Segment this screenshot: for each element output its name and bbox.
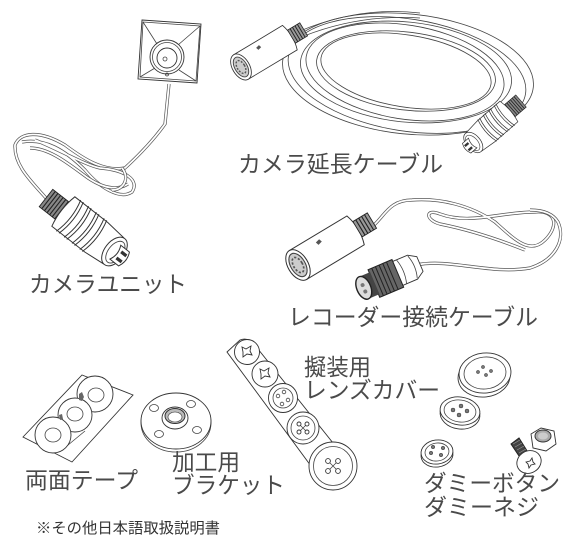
label: dummy button and dummy screw: ダミーボタン	[424, 470, 560, 496]
label: processing bracket	[172, 449, 285, 498]
recorder cable threaded plug	[351, 250, 426, 304]
label: dummy button and dummy screw	[424, 470, 560, 520]
camera unit illustration	[15, 20, 201, 276]
label: recorder connection cable: レコーダー接続ケーブル	[288, 304, 538, 330]
double sided tape illustration	[23, 375, 133, 462]
label: processing bracket: ブラケット	[172, 472, 285, 498]
recorder cable loops	[374, 200, 561, 270]
nut	[531, 428, 556, 451]
label: camera unit: カメラユニット	[29, 271, 187, 297]
dummy screw and nut illustration	[511, 428, 556, 478]
large button	[456, 350, 513, 400]
camera square housing	[138, 20, 201, 83]
recorder connection cable illustration	[281, 200, 561, 304]
extension cable plug	[456, 90, 530, 160]
small button	[419, 438, 455, 469]
label: dummy lens cover	[304, 354, 440, 403]
label: processing bracket: 加工用	[172, 449, 240, 475]
label: dummy button and dummy screw: ダミーネジ	[424, 494, 539, 520]
label: dummy lens cover: レンズカバー	[304, 377, 440, 403]
cable coils	[276, 1, 540, 149]
camera connector	[34, 182, 138, 276]
note: other manuals: ※その他日本語取扱説明書	[36, 520, 220, 537]
recorder cable socket	[281, 206, 381, 285]
camera extension cable illustration	[226, 1, 540, 160]
camera unit cable	[15, 84, 169, 198]
extension cable socket	[226, 17, 311, 84]
dummy buttons illustration	[419, 350, 513, 469]
medium button	[438, 394, 482, 432]
label: double sided tape: 両面テープ	[25, 467, 138, 493]
label: dummy lens cover: 擬装用	[304, 354, 371, 380]
dummy lens cover strip illustration	[227, 339, 357, 490]
label: camera extension cable: カメラ延長ケーブル	[238, 151, 443, 177]
screw	[511, 438, 545, 478]
processing bracket illustration	[141, 393, 211, 452]
